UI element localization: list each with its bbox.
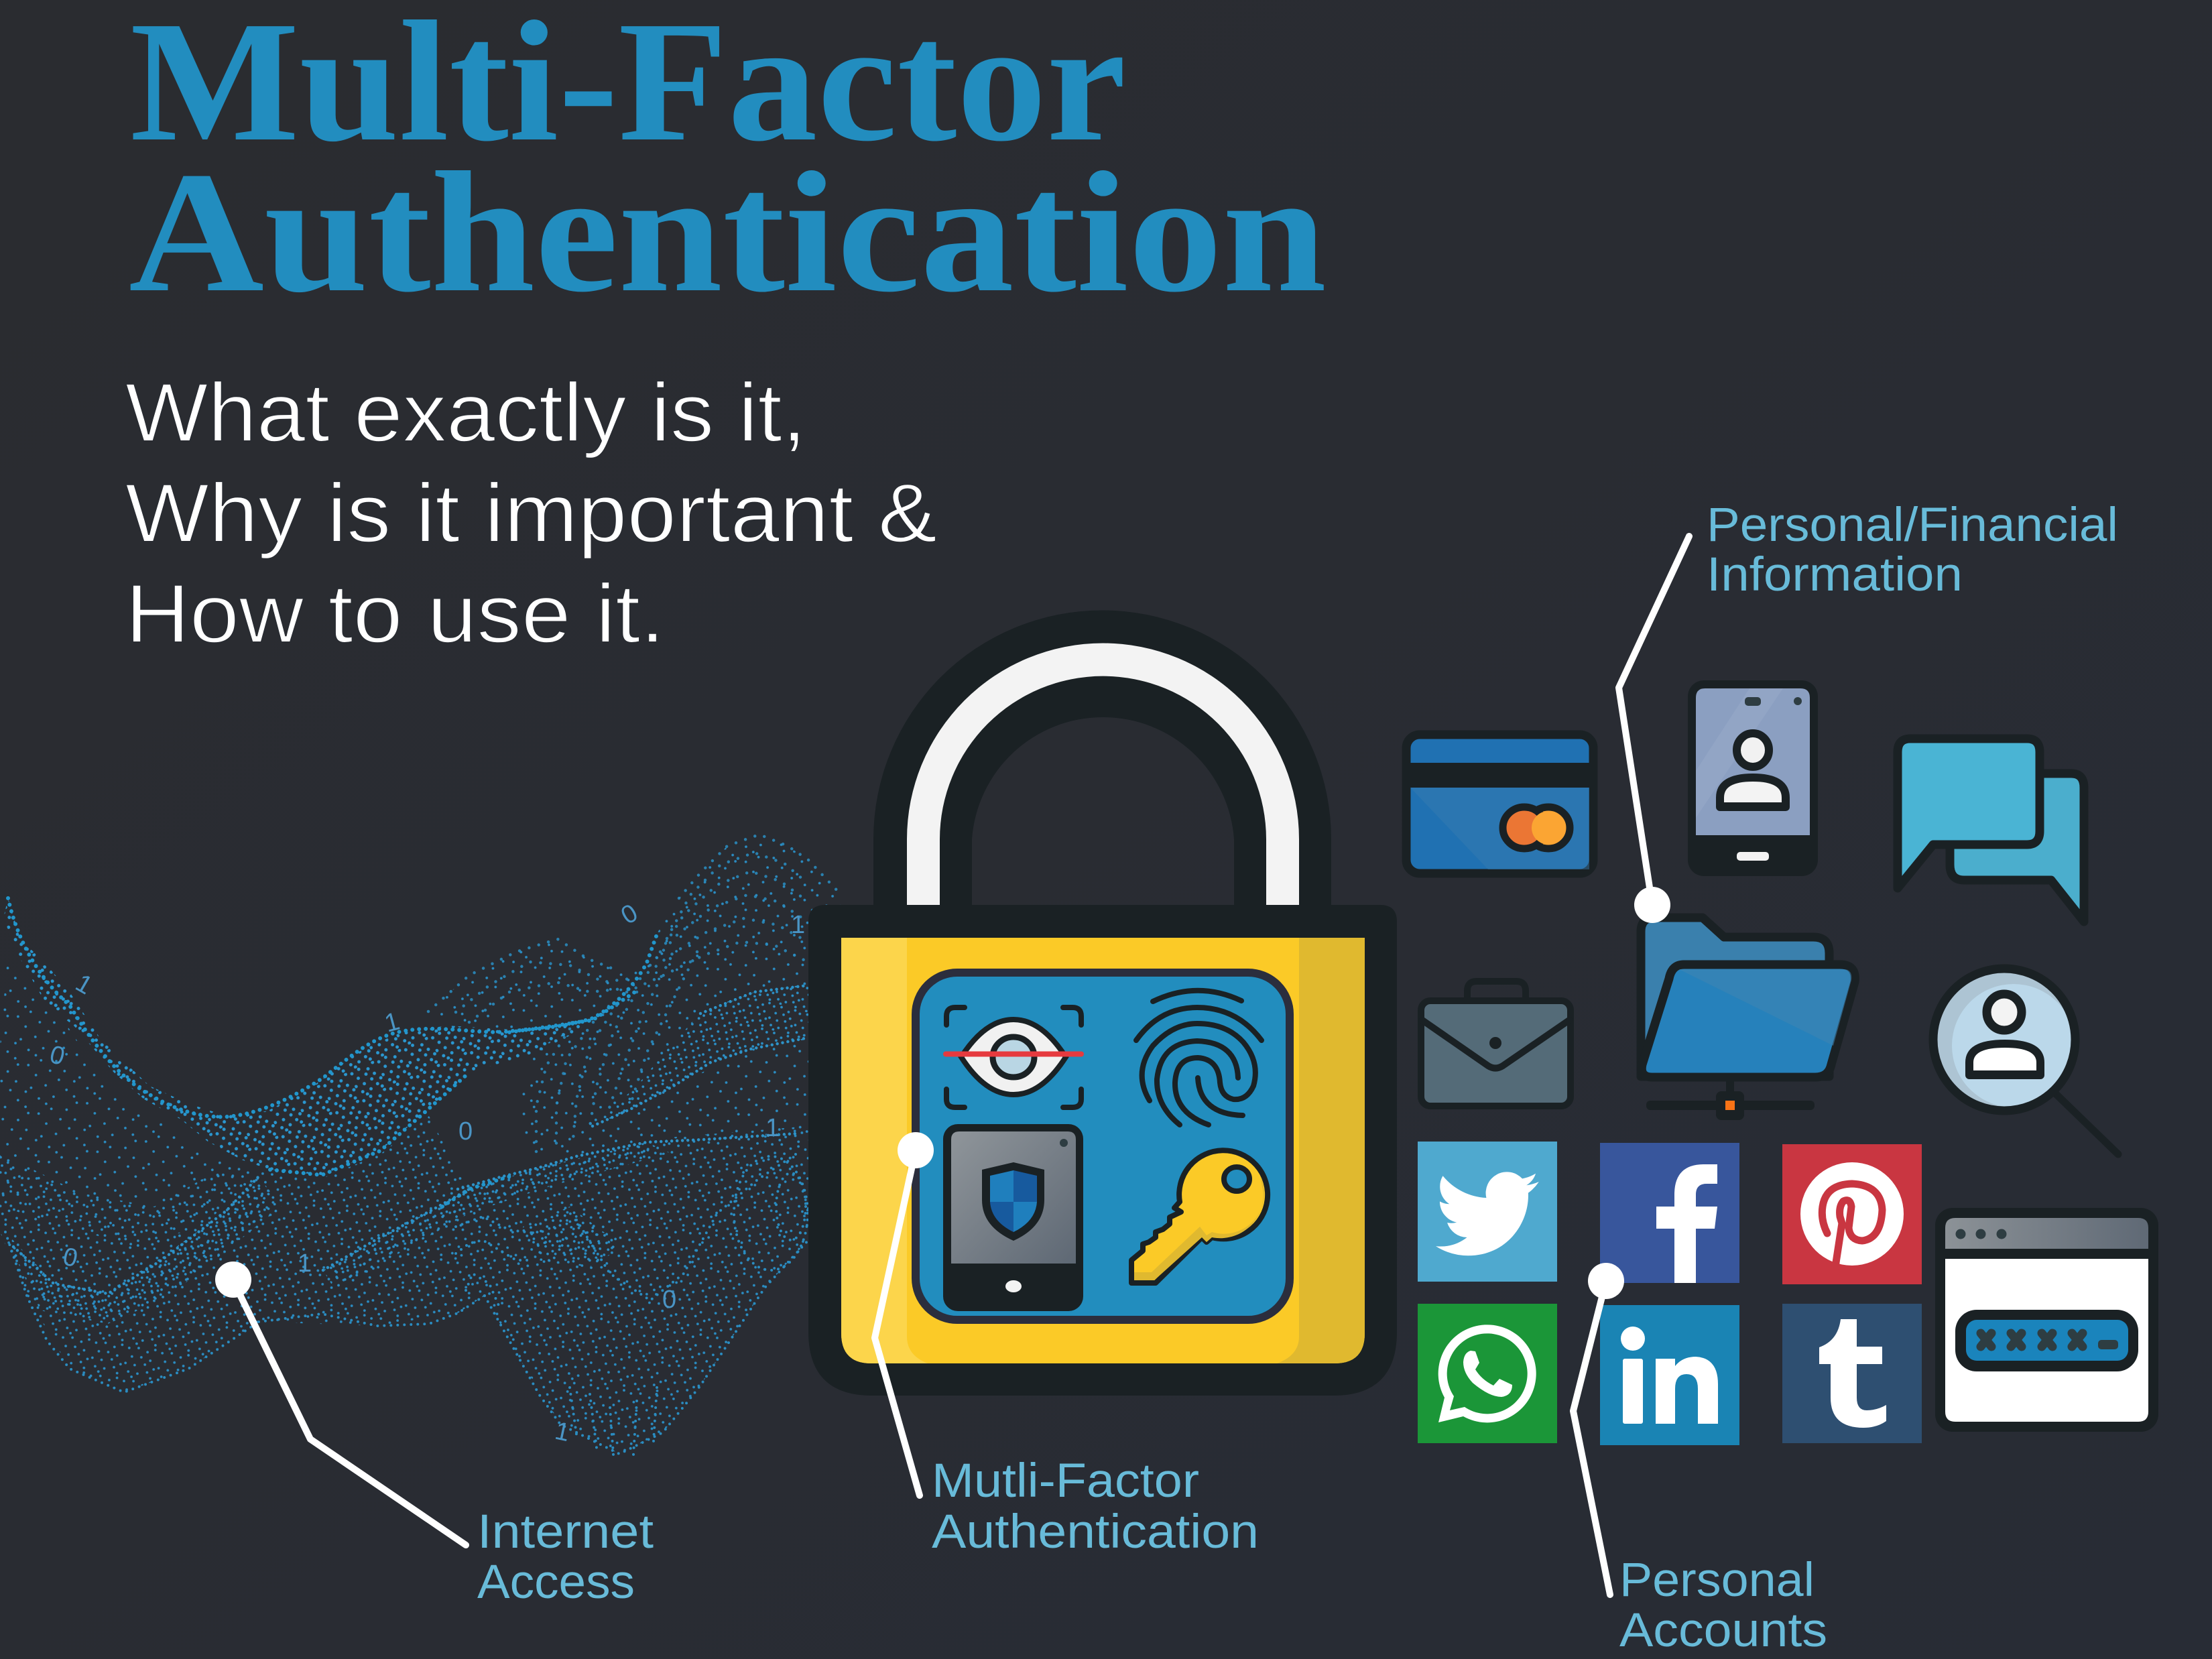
callout: multi-factor authentication [875, 1132, 1259, 1558]
icon: tablet with shield [943, 1124, 1083, 1311]
label: personal accounts: Accounts [1619, 1604, 1827, 1657]
padlock [808, 610, 1397, 1396]
icon: fingerprint [1136, 991, 1262, 1125]
binary digits: 0 [458, 1117, 473, 1146]
binary digits: 0 [60, 1243, 80, 1273]
social tile: whatsapp [1418, 1304, 1557, 1443]
icon: key [1131, 1150, 1268, 1283]
blue factor panel [916, 973, 1290, 1320]
dense ridge sheets [3, 898, 593, 1175]
binary digits: 0 [662, 1286, 676, 1314]
binary digits: 1 [552, 1417, 572, 1447]
icon: credit card [1406, 735, 1593, 873]
title: Authentication [129, 136, 1327, 328]
label: internet access: Access [477, 1556, 635, 1609]
label: multi-factor authentication: Mutli-Factor [932, 1455, 1199, 1508]
binary digits: 1 [765, 1114, 780, 1142]
label: personal accounts: Personal [1619, 1554, 1815, 1607]
icon: folder with network [1641, 918, 1855, 1120]
label: multi-factor authentication: Authentication [932, 1506, 1259, 1558]
binary digits: 1 [791, 911, 805, 939]
binary digits: 0 [617, 899, 643, 930]
binary digits: 1 [381, 1007, 403, 1038]
social tile: pinterest [1782, 1144, 1922, 1284]
sparse lower sheets [0, 1116, 808, 1454]
social tile: tumblr [1782, 1304, 1922, 1443]
password field [1955, 1310, 2138, 1371]
icon: magnifying glass with user [1933, 969, 2118, 1154]
icon: briefcase [1421, 981, 1571, 1106]
social tile: linkedin [1600, 1305, 1739, 1445]
icon: chat bubbles [1898, 739, 2084, 922]
icon: smartphone with user [1688, 680, 1818, 876]
binary digits [47, 899, 805, 1447]
subtitle [125, 367, 937, 660]
binary digits: 1 [71, 969, 97, 1000]
medium density bands [5, 984, 808, 1324]
label: internet access [477, 1506, 654, 1609]
shackle [873, 610, 1331, 912]
subtitle: Why is it important & [125, 467, 937, 560]
label: multi-factor authentication [932, 1455, 1259, 1558]
lock body [808, 905, 1397, 1396]
social tile: twitter [1418, 1142, 1557, 1282]
subtitle: What exactly is it, [125, 367, 806, 459]
label: personal financial information: Information [1707, 548, 1963, 601]
binary digits: 0 [47, 1040, 68, 1071]
label: personal financial information: Personal/Financial [1707, 499, 2118, 552]
very sparse sheets [0, 835, 841, 1247]
binary digits: 1 [298, 1249, 312, 1278]
label: internet access: Internet [477, 1506, 654, 1558]
icon: browser password window [1935, 1208, 2158, 1432]
label: personal accounts [1619, 1554, 1827, 1657]
title [129, 0, 1327, 328]
callout: personal accounts [1573, 1263, 1827, 1657]
user figure [1720, 733, 1786, 809]
social tile: facebook [1600, 1143, 1739, 1283]
callout: personal financial information [1619, 499, 2118, 923]
subtitle: How to use it. [125, 568, 665, 660]
label: personal financial information [1707, 499, 2118, 601]
icon: shield [982, 1162, 1044, 1241]
callout: internet access [215, 1262, 654, 1609]
particle wave: internet [0, 835, 841, 1455]
icon: eye scan [946, 1007, 1081, 1107]
